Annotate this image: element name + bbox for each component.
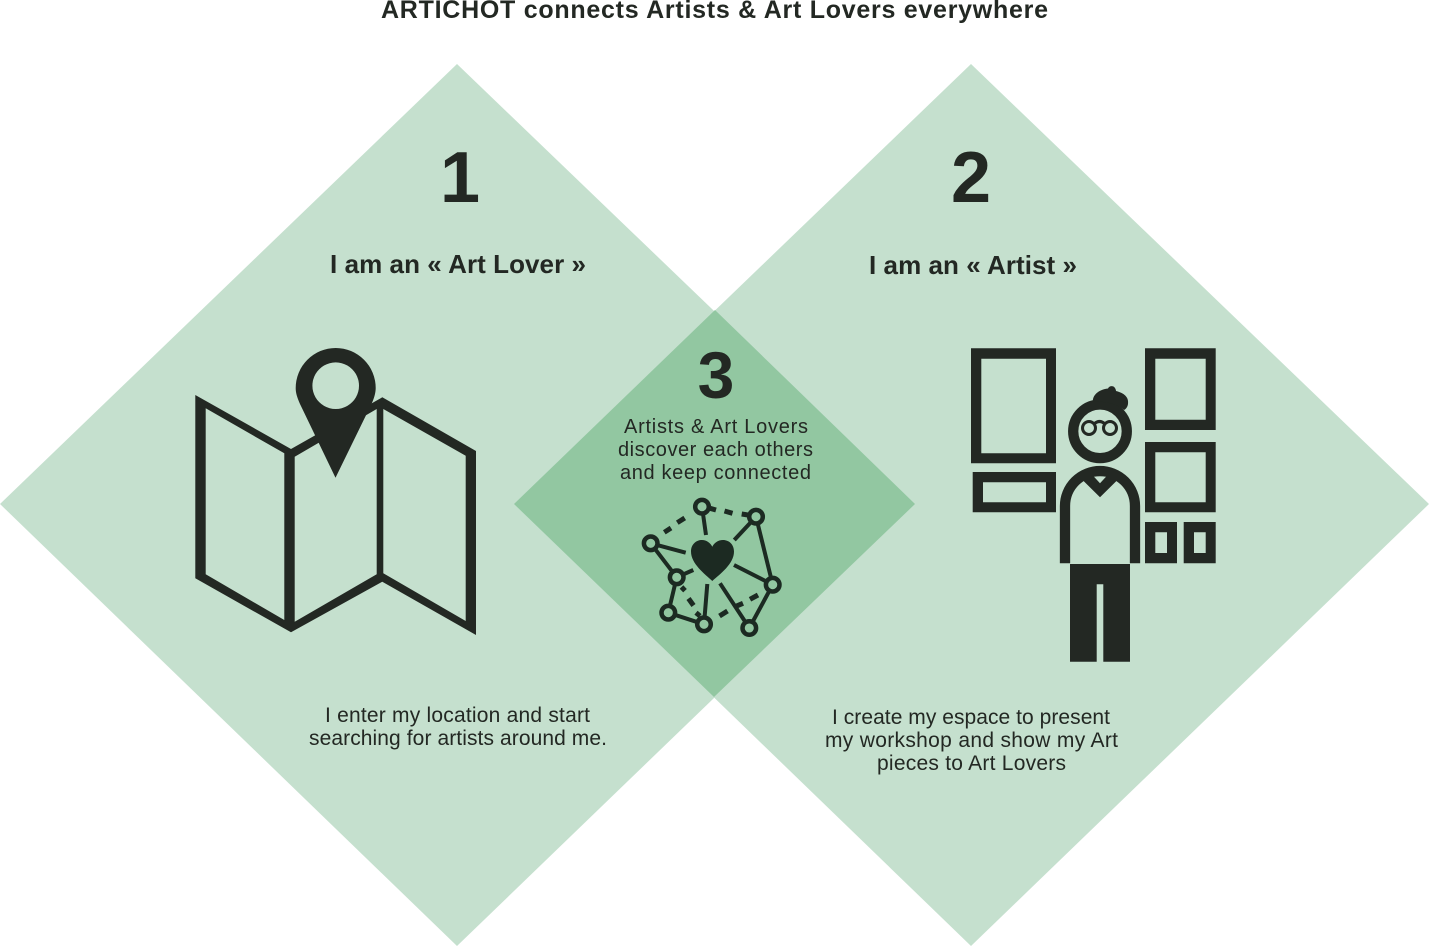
text: connection description: discover each others xyxy=(618,439,813,461)
text: art lover description xyxy=(309,704,607,750)
text: artist description: I create my espace to present xyxy=(832,706,1110,729)
panel: artist diamond xyxy=(514,64,1429,946)
text: artist description: pieces to Art Lovers xyxy=(877,752,1066,775)
icon: network of connected nodes around a heart xyxy=(644,500,780,635)
step number 3: 3 xyxy=(698,338,734,412)
icon: folded map with location pin xyxy=(195,348,476,635)
heading: artist: I am an « Artist » xyxy=(869,250,1077,280)
text: connection description xyxy=(618,416,813,484)
step number 1: 1 xyxy=(440,138,480,218)
step number 2: 2 xyxy=(951,138,991,218)
text: art lover description: searching for artists around me. xyxy=(309,727,607,750)
text: connection description: Artists & Art Lovers xyxy=(624,416,808,438)
text: artist description: my workshop and show my Art xyxy=(825,729,1118,752)
panel: overlap diamond xyxy=(514,310,915,697)
heading: art lover: I am an « Art Lover » xyxy=(330,249,586,279)
icon: artist with framed pictures xyxy=(971,348,1216,662)
panel: art lover diamond xyxy=(0,64,915,946)
text: artist description xyxy=(825,706,1118,775)
text: connection description: and keep connected xyxy=(620,462,811,484)
text: art lover description: I enter my location and start xyxy=(325,704,590,727)
